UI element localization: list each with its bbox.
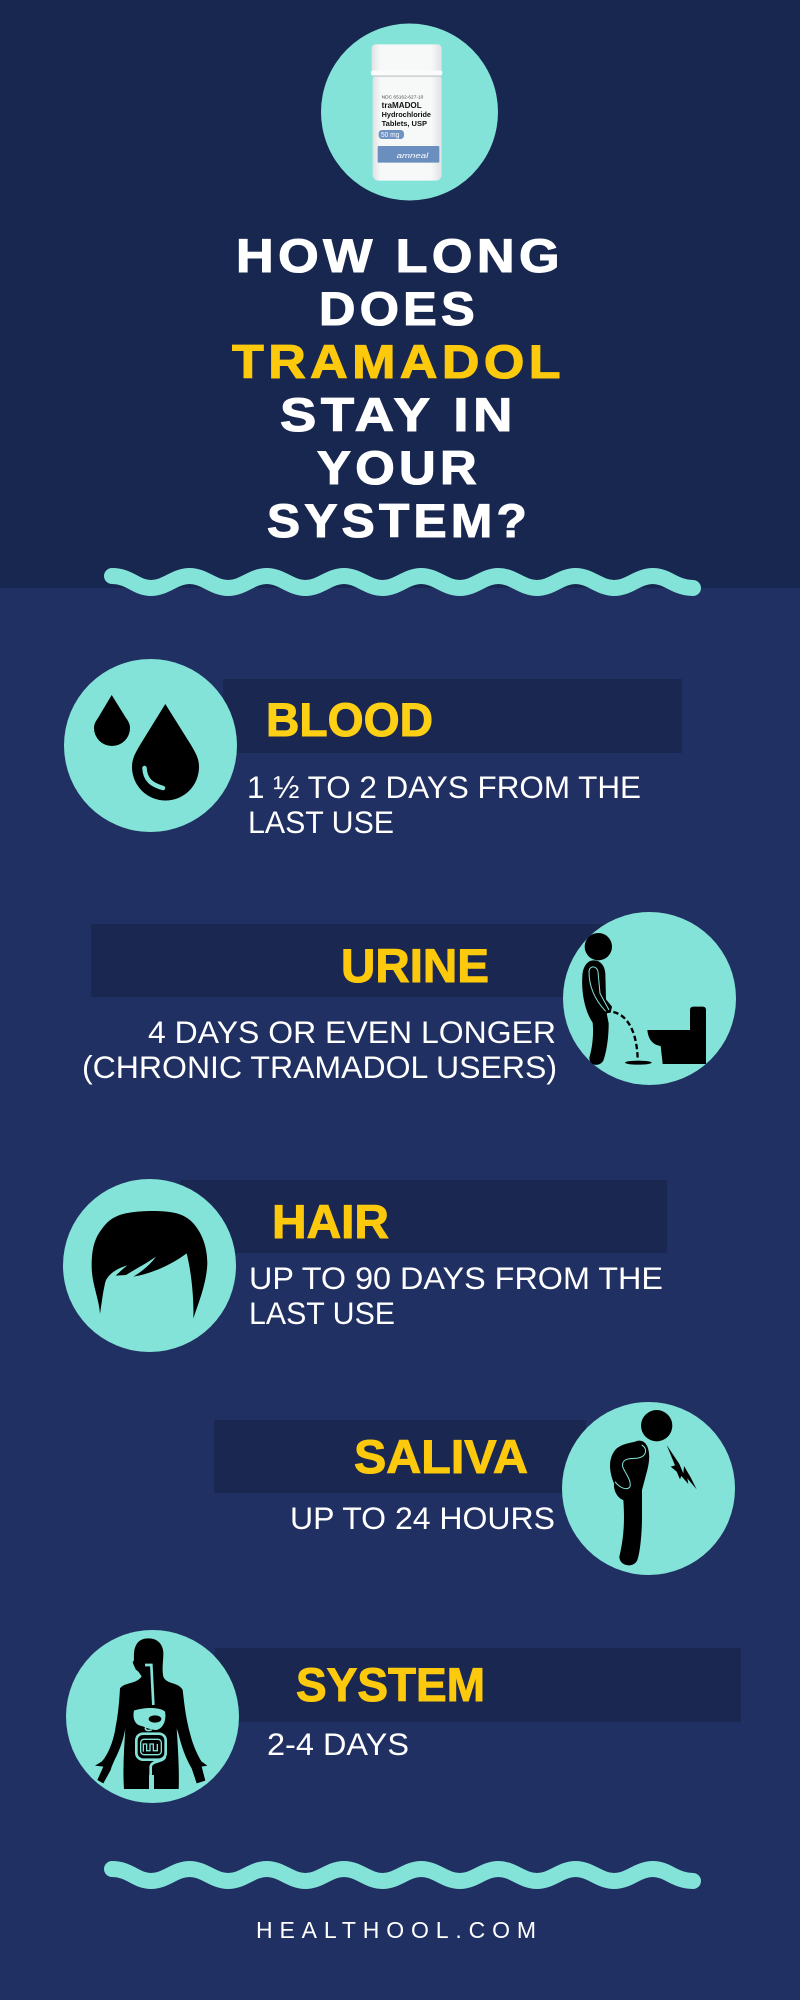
icon: tramadol pill bottle in teal circle: amneal [397,153,429,160]
heading: hair: HAIR [272,1195,389,1248]
bottom wavy divider [112,1869,693,1881]
title: DOES [319,282,479,335]
text: saliva duration: UP TO 24 HOURS [290,1500,555,1536]
icon: human digestive system [66,1630,239,1803]
icon: tramadol pill bottle in teal circle: Hydrochloride [382,110,431,119]
icon: tramadol pill bottle in teal circle [321,24,498,200]
text: system duration: 2-4 DAYS [267,1726,409,1762]
heading: blood: BLOOD [266,693,433,746]
text: hair duration: UP TO 90 DAYS FROM THE [249,1260,663,1296]
footer source: healthool.com: HEALTHOOL.COM [256,1917,536,1943]
title: STAY IN [280,388,517,441]
heading: system: SYSTEM [296,1658,485,1711]
icon: tramadol pill bottle in teal circle: traMADOL [382,101,422,110]
icon: person spitting [562,1402,735,1575]
text: urine duration [82,1014,557,1085]
top wavy divider [112,576,693,588]
icon: tramadol pill bottle in teal circle: 50 mg [381,132,399,139]
text: hair duration [249,1260,663,1331]
heading band: saliva [214,1420,586,1493]
title: SYSTEM? [267,494,531,547]
icon: tramadol pill bottle in teal circle: Tablets, USP [382,119,427,128]
panel: urine [82,912,736,1085]
text: blood duration [247,769,641,840]
panel: blood [64,659,682,840]
icon: tramadol pill bottle in teal circle: NDC 65162-627-10 [382,94,424,99]
heading band: system [215,1648,741,1722]
text: urine duration: 4 DAYS OR EVEN LONGER [148,1014,556,1050]
heading band: hair [180,1180,667,1253]
text: blood duration: LAST USE [248,804,394,840]
heading: urine: URINE [341,939,489,992]
title [232,229,565,547]
icon: person urinating toward toilet [563,912,736,1085]
panel: hair [63,1179,667,1352]
title: HOW LONG [236,229,564,282]
heading: saliva: SALIVA [354,1430,528,1483]
panel: system [66,1630,741,1803]
heading band: blood [223,679,682,753]
text: urine duration: (CHRONIC TRAMADOL USERS) [82,1049,557,1085]
text: hair duration: LAST USE [249,1295,395,1331]
icon: blood drops [64,659,237,832]
panel: saliva [214,1402,735,1575]
title: TRAMADOL [232,335,565,388]
text: blood duration: 1 ½ TO 2 DAYS FROM THE [247,769,641,805]
icon: hair [63,1179,236,1352]
heading band: urine [91,924,606,997]
title: YOUR [317,441,481,494]
